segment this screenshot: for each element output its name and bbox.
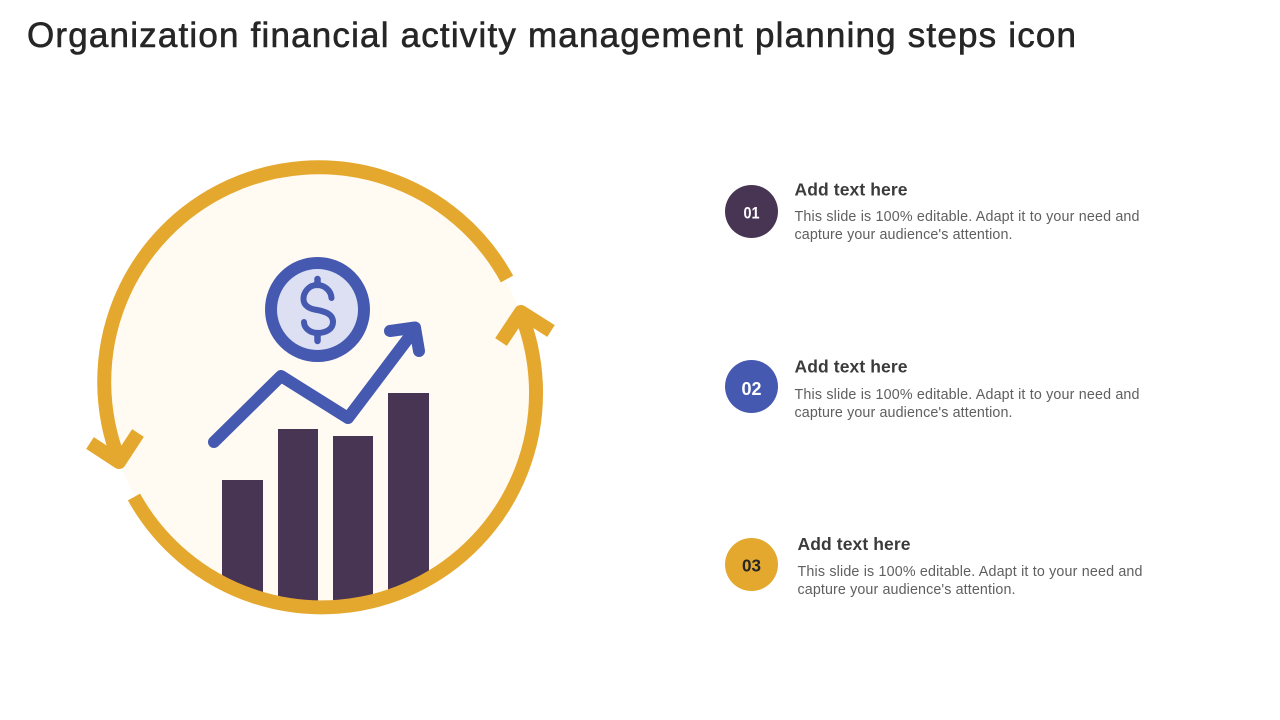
badge 02 [725, 360, 778, 413]
icon: dollar coin [271, 263, 364, 356]
heading 02: Add text here [794, 356, 908, 376]
title: Organization financial activity management planning steps icon [27, 16, 1076, 55]
step 01 [725, 180, 1140, 243]
heading 03: Add text here [798, 534, 911, 554]
step 03 [725, 534, 1143, 598]
body 01: capture your audience's attention. [794, 227, 1012, 243]
body 01: This slide is 100% editable. Adapt it to your need and [794, 209, 1140, 225]
badge 01 [725, 185, 778, 238]
badge 01: 01 [744, 204, 760, 222]
badge 03 [725, 538, 778, 591]
body 03: capture your audience's attention. [798, 582, 1016, 598]
heading 01: Add text here [794, 180, 908, 200]
bar chart [222, 393, 429, 600]
badge 02: 02 [742, 379, 762, 399]
cream background circle [106, 174, 534, 602]
arrow: rising trend line [214, 328, 419, 442]
body 02: capture your audience's attention. [794, 405, 1012, 421]
step 02 [725, 356, 1140, 421]
arrow: lower-right cycle arc [134, 312, 551, 607]
body 02: This slide is 100% editable. Adapt it to your need and [794, 387, 1140, 403]
body 03: This slide is 100% editable. Adapt it to your need and [798, 564, 1143, 580]
arrow: upper-left cycle arc [90, 167, 507, 462]
icon: financial growth cycle [90, 167, 551, 626]
badge 03: 03 [742, 556, 761, 576]
